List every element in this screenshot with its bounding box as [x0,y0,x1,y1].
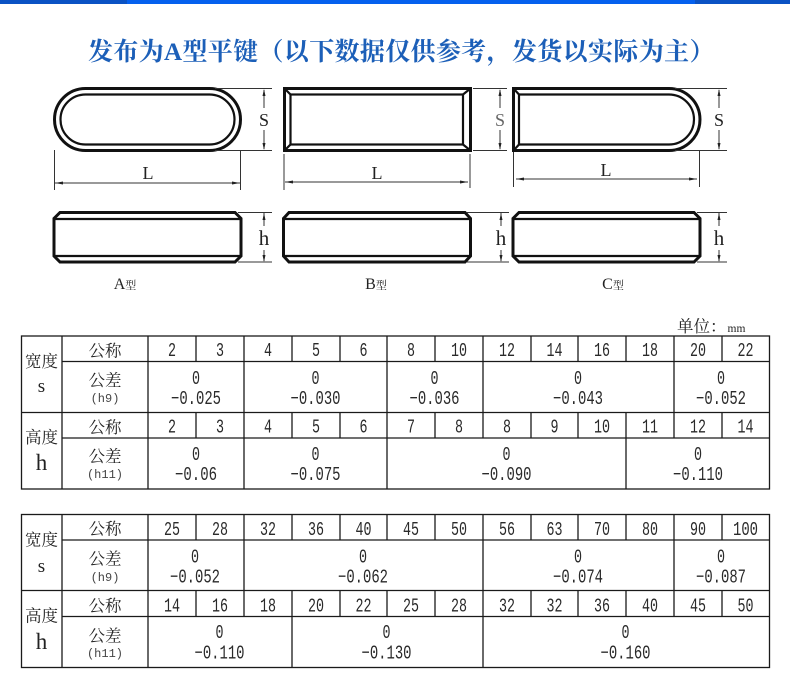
table 2 height nominal values: 20 [308,596,324,618]
type A S dimension: S [259,110,269,130]
table 1 width nominal values: 4 [264,340,272,362]
table 2 row labels: 高度 [25,606,58,626]
table 1 width tolerances: 0 [312,368,320,390]
table 1 row labels: 公差 [88,371,122,390]
table 2 height nominal values: 40 [642,596,658,618]
table 1 height tolerances: −0.110 [673,464,723,486]
table 1 row labels: h [36,450,48,475]
table 2 width nominal values: 63 [546,519,562,541]
table 1 height nominal values: 8 [503,416,511,438]
table 1 row labels: 高度 [25,428,58,447]
table 1 width nominal values: 20 [690,340,706,362]
table 1 height nominal values: 10 [594,416,610,438]
table 1 row labels [25,342,123,482]
type A L dimension: L [142,163,154,183]
table 2 width tolerances: 0 [191,546,199,568]
table 1 height tolerances [175,444,723,486]
table 1 width nominal values: 10 [451,340,467,362]
table 2 height nominal values: 32 [499,596,515,618]
type B S dimension [473,88,507,150]
table 1 width nominal values: 18 [642,340,658,362]
table 1 height tolerances: 0 [192,444,200,466]
table 1 width tolerances: 0 [574,368,582,390]
table 2 height nominal values: 16 [212,596,228,618]
table 1 height nominal values: 14 [738,416,754,438]
table 2 width tolerances: 0 [717,546,725,568]
table 2 row labels: 公差 [88,550,122,568]
table 1 height tolerances: −0.075 [290,464,340,486]
table 2 height nominal values: 14 [164,596,180,618]
type A side view [54,212,241,262]
type C S dimension [675,88,727,150]
table 1 width nominal values: 12 [499,340,515,362]
table 1 height tolerances: 0 [312,444,320,466]
table 1 row labels: 公差 [88,447,122,466]
table 1 row labels: 公称 [88,418,122,437]
table 2 height nominal values: 32 [546,596,562,618]
table 1 width nominal values: 8 [407,340,415,362]
type B h dimension [467,212,509,262]
table 2 row labels: h [36,629,48,654]
table 1 height nominal values: 2 [168,416,176,438]
table 2 height tolerances: −0.110 [194,642,244,664]
table 2 width nominal values: 32 [260,519,276,541]
table 1 width nominal values: 16 [594,340,610,362]
table 2 height nominal values: 50 [738,596,754,618]
table 2 width tolerances: −0.074 [553,566,603,588]
table 2 width tolerances: 0 [574,546,582,568]
table 1 width tolerances: −0.030 [290,388,340,410]
diagram: type B key [284,88,509,293]
type A S dimension [215,88,272,150]
table 1 width nominal values: 14 [546,340,562,362]
top blue bar [0,0,790,4]
table 2 row labels: 公称 [88,520,122,538]
diagram: type C key [513,88,727,293]
type C top view [514,88,700,150]
table 1 width nominal values: 3 [216,340,224,362]
table 2 row labels: 公差 [88,626,122,646]
table 2 width nominal values: 45 [403,519,419,541]
table 1 width nominal values [168,340,754,362]
type A h dimension: h [259,226,270,250]
table 1 row labels: 公称 [88,342,122,360]
table 2 row labels: s [38,556,45,577]
type B L dimension [284,154,470,190]
table 2 grid [22,514,770,668]
table 2 row labels: 宽度 [25,530,58,550]
table 2 width nominal values: 40 [356,519,372,541]
table 1 [22,336,770,489]
table 2 width nominal values [164,519,758,541]
table 2 height nominal values: 28 [451,596,467,618]
type B top view [284,88,470,150]
type C L dimension: L [600,160,612,180]
type A h dimension [238,212,272,262]
table 2 row labels: 公称 [88,596,122,616]
type C L dimension [514,150,700,187]
table 2 width nominal values: 50 [451,519,467,541]
type B h dimension: h [496,226,507,250]
table 2 width nominal values: 80 [642,519,658,541]
table 2 row labels: (h9) [91,571,119,585]
type B S dimension: S [495,110,505,130]
table 2 height tolerances: 0 [382,622,390,644]
title: 发布为A型平键（以下数据仅供参考，发货以实际为主） [88,38,715,67]
table 1 grid [22,336,770,489]
type B label: B型 [365,276,387,293]
type C h dimension: h [714,226,725,250]
table 1 height nominal values: 11 [642,416,658,438]
table 2 width tolerances: −0.062 [338,566,388,588]
table 2 height tolerances: 0 [216,622,224,644]
table 1 height nominal values: 6 [360,416,368,438]
type A top view [54,88,240,150]
table 1 row labels: s [38,376,45,397]
table 2 height nominal values: 22 [356,596,372,618]
table 1 width tolerances: −0.025 [171,388,221,410]
table 2 height nominal values: 36 [594,596,610,618]
type B side view [284,212,470,262]
table 2 width tolerances: −0.087 [696,566,746,588]
unit note: 单位：mm [677,317,745,336]
type A label: A型 [114,276,136,293]
table 2 width tolerances: −0.052 [170,566,220,588]
table 1 width tolerances: 0 [717,368,725,390]
table 1 height tolerances: −0.090 [482,464,532,486]
table 1 height tolerances: 0 [502,444,510,466]
table 2 width nominal values: 100 [733,519,758,541]
table 2 width nominal values: 36 [308,519,324,541]
table 2 [22,514,770,668]
table 1 height nominal values: 8 [455,416,463,438]
table 1 height nominal values: 7 [407,416,415,438]
table 1 height tolerances: −0.06 [175,464,217,486]
type B L dimension: L [372,163,382,183]
table 2 height nominal values [164,596,754,618]
table 2 width nominal values: 70 [594,519,610,541]
table 1 width tolerances [171,368,746,410]
table 1 row labels: 宽度 [25,352,58,371]
table 2 row labels: (h11) [87,647,123,661]
table 1 height nominal values [168,416,754,438]
type C h dimension [697,212,727,262]
table 1 height nominal values: 4 [264,416,272,438]
table 1 row labels: (h11) [87,468,123,482]
table 1 height tolerances: 0 [694,444,702,466]
table 2 width nominal values: 56 [499,519,515,541]
table 2 height nominal values: 25 [403,596,419,618]
table 1 height nominal values: 3 [216,416,224,438]
table 1 row labels: (h9) [91,392,119,406]
table 2 height nominal values: 18 [260,596,276,618]
type C S dimension: S [714,110,724,130]
table 1 width nominal values: 5 [312,340,320,362]
table 1 height nominal values: 12 [690,416,706,438]
table 2 height tolerances: 0 [622,622,630,644]
table 1 width tolerances: 0 [430,368,438,390]
table 1 width tolerances: −0.052 [696,388,746,410]
diagram: type A key [54,88,272,293]
table 1 width tolerances: −0.036 [410,388,460,410]
table 1 height nominal values: 5 [312,416,320,438]
table 2 width nominal values: 28 [212,519,228,541]
table 2 height nominal values: 45 [690,596,706,618]
table 2 height tolerances [194,622,650,664]
table 1 width nominal values: 6 [360,340,368,362]
table 2 row labels [25,520,123,661]
table 2 width nominal values: 25 [164,519,180,541]
table 2 width tolerances: 0 [359,546,367,568]
table 1 width nominal values: 2 [168,340,176,362]
table 1 height nominal values: 9 [550,416,558,438]
table 2 width tolerances [170,546,746,588]
table 2 height tolerances: −0.160 [600,642,650,664]
table 1 width nominal values: 22 [738,340,754,362]
table 2 height tolerances: −0.130 [362,642,412,664]
table 2 width nominal values: 90 [690,519,706,541]
table 1 width tolerances: 0 [192,368,200,390]
type C side view [513,212,700,262]
type C label: C型 [602,276,624,293]
table 1 width tolerances: −0.043 [553,388,603,410]
type A L dimension [54,150,240,190]
